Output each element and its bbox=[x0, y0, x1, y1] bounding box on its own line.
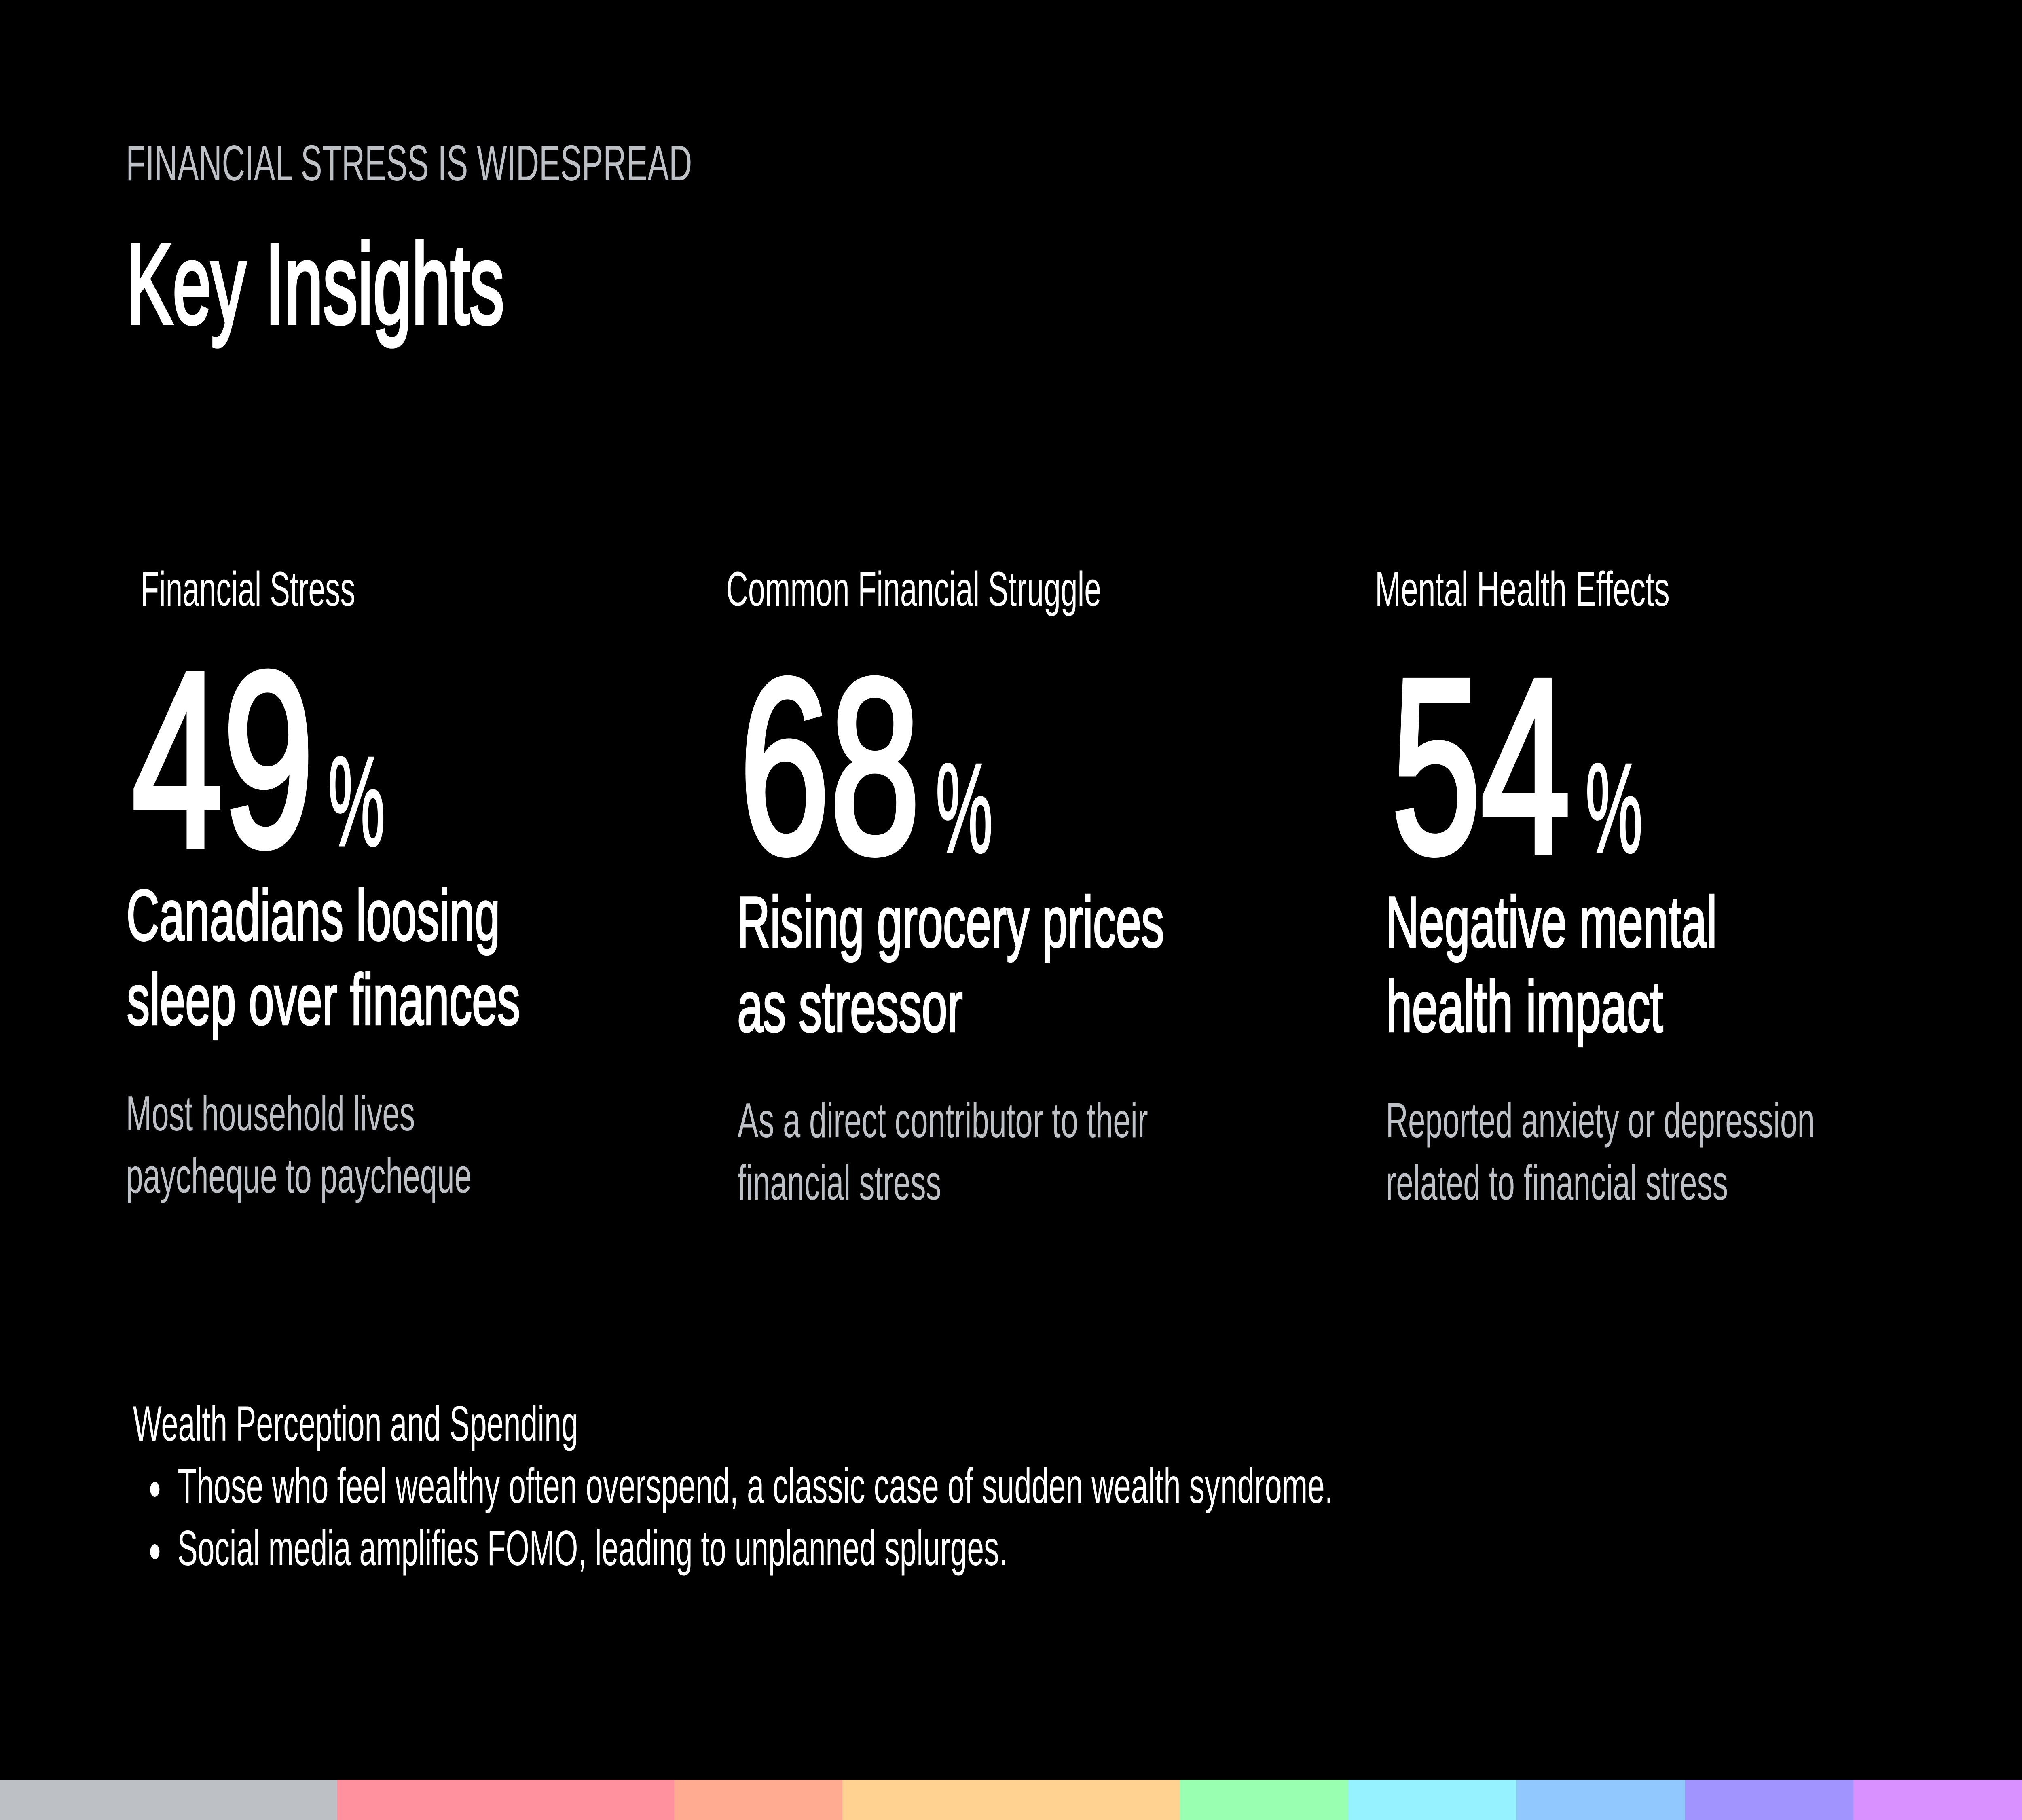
percent sign: % bbox=[328, 730, 385, 872]
panel: common financial struggle bbox=[726, 562, 1164, 1210]
percent sign: % bbox=[1586, 737, 1643, 879]
panel label: Mental Health Effects bbox=[1375, 562, 1670, 616]
eyebrow heading: FINANCIAL STRESS IS WIDESPREAD bbox=[126, 135, 692, 191]
description bbox=[738, 1093, 1148, 1210]
title: Key Insights bbox=[126, 220, 504, 347]
heading: sleep over finances bbox=[127, 960, 520, 1040]
heading: health impact bbox=[1386, 967, 1663, 1047]
description bbox=[1386, 1093, 1815, 1210]
big number 54: 54 bbox=[1392, 627, 1570, 905]
heading bbox=[1386, 882, 1717, 1047]
bullet point 1: Those who feel wealthy often overspend, a classic case of sudden wealth syndrome. bbox=[178, 1458, 1333, 1513]
panel label: Financial Stress bbox=[141, 562, 355, 616]
description: financial stress bbox=[738, 1155, 941, 1210]
bullet point 2: Social media amplifies FOMO, leading to unplanned splurges. bbox=[178, 1520, 1007, 1576]
heading: Canadians loosing bbox=[126, 875, 500, 955]
heading: as stressor bbox=[737, 967, 963, 1047]
description: paycheque to paycheque bbox=[126, 1148, 472, 1203]
section heading: Wealth Perception and Spending bbox=[133, 1395, 578, 1451]
description: Reported anxiety or depression bbox=[1386, 1093, 1815, 1148]
rainbow colour bar bbox=[0, 1780, 2022, 1820]
percent sign: % bbox=[936, 737, 993, 879]
heading bbox=[126, 875, 520, 1040]
description: related to financial stress bbox=[1386, 1155, 1728, 1210]
description: As a direct contributor to their bbox=[738, 1093, 1148, 1148]
big number 49: 49 bbox=[132, 620, 314, 898]
description bbox=[126, 1086, 472, 1203]
heading: Negative mental bbox=[1386, 882, 1717, 962]
heading: Rising grocery prices bbox=[737, 882, 1164, 962]
panel: wealth perception and spending bbox=[133, 1395, 1333, 1576]
panel: mental health effects bbox=[1375, 562, 1815, 1210]
big number 68: 68 bbox=[739, 627, 920, 905]
panel: financial stress bbox=[126, 562, 520, 1203]
panel label: Common Financial Struggle bbox=[726, 562, 1101, 616]
description: Most household lives bbox=[126, 1086, 415, 1141]
heading bbox=[737, 882, 1164, 1047]
